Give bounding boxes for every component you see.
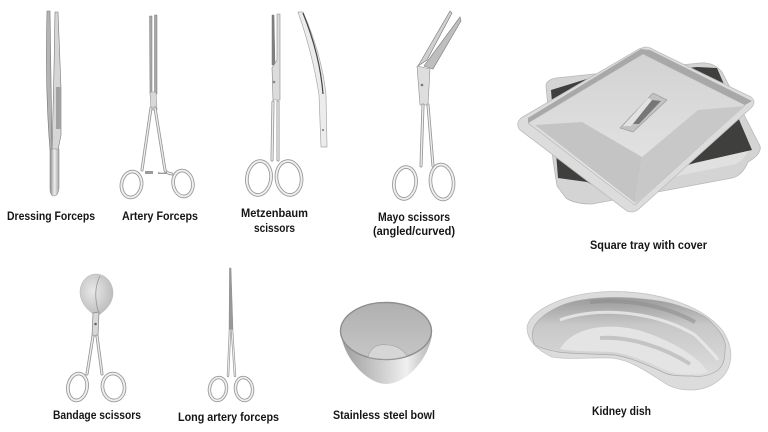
icon: mayo scissors [392,11,461,201]
icon: stainless steel bowl [340,302,432,384]
label: square tray with cover: Square tray with cover [590,240,707,252]
icon: kidney dish [527,292,731,390]
label: mayo scissors: Mayo scissors [378,212,450,224]
panel: metzenbaum scissors [241,12,327,235]
label: kidney dish: Kidney dish [592,406,651,418]
label: scissors: scissors [254,223,295,235]
label: metzenbaum: Metzenbaum [241,208,308,220]
label: long artery forceps: Long artery forceps [178,412,279,424]
panel: artery forceps [119,15,198,223]
label: artery forceps: Artery Forceps [122,211,198,223]
label: stainless steel bowl: Stainless steel bowl [333,410,435,422]
panel: bandage scissors [53,274,141,422]
icon: bandage scissors [66,274,126,402]
panel: stainless steel bowl [333,302,435,422]
label: dressing forceps: Dressing Forceps [7,211,95,223]
icon: lid handle [620,93,667,132]
icon: long artery forceps [208,268,254,402]
panel: square tray with cover [518,47,760,252]
panel: long artery forceps [178,268,279,424]
label: angled/curved: (angled/curved) [373,226,455,238]
icon: tray lid [518,47,754,212]
panel: mayo scissors [373,11,461,238]
panel: dressing forceps [7,11,95,223]
icon: tray base [546,63,760,204]
panel: kidney dish [527,292,731,418]
icon: dressing forceps [46,11,61,196]
icon: artery forceps [119,15,195,199]
icon: curved blade detail [298,12,327,147]
label: bandage scissors: Bandage scissors [53,410,141,422]
icon: metzenbaum scissors [245,14,304,197]
